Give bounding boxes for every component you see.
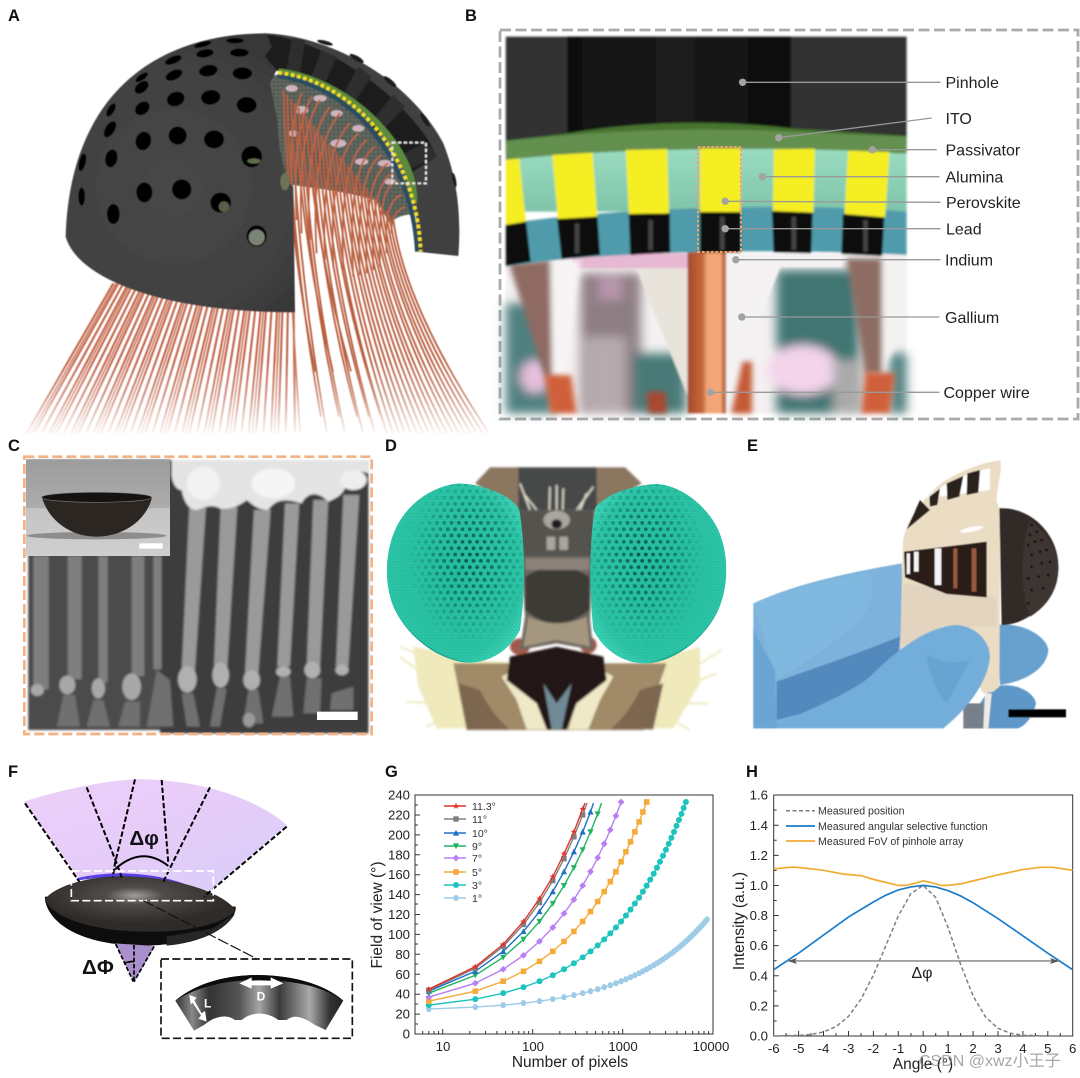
pinholes on device	[1027, 524, 1051, 605]
legend labels: 5°	[472, 867, 482, 879]
axis ticks	[415, 805, 709, 1034]
callout: Pinhole	[739, 75, 999, 92]
y tick labels: 0.2	[750, 998, 768, 1013]
curve 11.3 degrees	[429, 803, 585, 989]
legend labels	[472, 801, 496, 905]
legend labels: 9°	[472, 841, 482, 853]
curve 7 degrees	[429, 802, 621, 997]
mouthparts	[507, 647, 607, 729]
curve 5 degrees	[429, 802, 647, 1001]
x tick labels: -6	[768, 1041, 780, 1056]
legend	[786, 806, 988, 848]
upper window with dark slots	[907, 468, 990, 528]
panel label A: A	[8, 7, 20, 25]
column highlights	[575, 217, 868, 253]
y tick labels: 40	[395, 987, 410, 1002]
x tick labels: 10000	[693, 1039, 729, 1054]
upper head	[475, 467, 642, 513]
x tick labels	[436, 1039, 729, 1054]
y tick labels: 60	[395, 967, 410, 982]
small angle arc	[124, 962, 134, 963]
legend labels: 7°	[472, 853, 482, 865]
x tick labels: 6	[1069, 1041, 1076, 1056]
x tick labels	[768, 1041, 1076, 1056]
y tick labels: 100	[388, 927, 410, 942]
blurred teal and pink backdrop	[506, 270, 907, 413]
far right fingers	[997, 625, 1048, 685]
angle arc	[115, 856, 168, 869]
copper wires fanning below the dome	[27, 283, 295, 433]
white dashed zoom region	[71, 871, 213, 901]
plot frame	[415, 795, 713, 1034]
central face	[518, 510, 595, 650]
y tick labels: 240	[388, 788, 410, 802]
D dimension arrow	[239, 977, 283, 989]
light nanowires, right group	[182, 495, 359, 673]
y tick labels: 0	[403, 1026, 410, 1042]
curved wire ends at sensors	[291, 93, 405, 277]
antenna base	[543, 511, 570, 550]
callout: Passivator	[869, 142, 1021, 160]
Δφ label: Δφ	[911, 965, 933, 982]
panel G: field of view versus number of pixels chart	[369, 788, 729, 1071]
y tick labels: 140	[388, 887, 410, 902]
dashed field boundaries	[25, 779, 287, 897]
photosensor strip: passivator, lead and perovskite	[278, 72, 413, 203]
pink indium strip	[572, 253, 689, 268]
x tick labels: 1000	[608, 1039, 638, 1054]
y tick labels: 0.6	[750, 938, 768, 953]
pink indium spots	[286, 85, 396, 185]
callout: Alumina	[758, 170, 1003, 186]
lead black columns	[506, 211, 884, 266]
width arrow with arrowheads	[788, 958, 1059, 964]
D label: D	[257, 990, 266, 1004]
copper wires rising to the sensors	[283, 90, 489, 433]
dotted highlight around one pixel	[698, 147, 741, 252]
middle window with dark slots	[904, 542, 987, 597]
cheek tufts	[413, 647, 700, 728]
inset photo of bowl	[26, 459, 170, 556]
layered render	[506, 37, 907, 413]
cone dashed boundaries	[116, 944, 154, 982]
legend: Measured FoV of pinhole array	[818, 836, 964, 848]
callout: Indium: Indium	[945, 252, 993, 270]
purple cone beneath the disc	[115, 943, 155, 982]
panel label C: C	[8, 437, 20, 455]
x tick labels: 100	[522, 1039, 544, 1054]
blue band at dome edge	[77, 873, 208, 895]
measured angular selective function curve	[774, 885, 1073, 970]
panel label H: H	[746, 763, 758, 781]
legend labels: 3°	[472, 880, 482, 892]
purple field-of-view fan	[24, 779, 287, 897]
y tick labels: 20	[395, 1007, 410, 1022]
scale bar	[317, 712, 358, 720]
head and face behind the eyes	[400, 467, 722, 730]
panel label E: E	[747, 437, 758, 455]
channel pillars	[287, 38, 437, 170]
pinhole openings on cut rim	[317, 39, 457, 188]
y tick labels: 200	[388, 827, 410, 842]
panel B: layered pixel cross-section with callouts	[500, 30, 1078, 419]
right compound eye	[590, 484, 726, 664]
y tick labels: 0.0	[750, 1028, 768, 1044]
callout: ITO: ITO	[946, 111, 972, 128]
callout: Pinhole: Pinhole	[946, 75, 999, 92]
y tick labels: 0.4	[750, 968, 768, 983]
panel label F: F	[8, 763, 18, 781]
panel label G: G	[385, 763, 398, 781]
panel C: SEM image of nanowires with inset photo	[24, 457, 372, 734]
ΔΦ label: ΔΦ	[82, 956, 114, 979]
x axis title: Number of pixels	[512, 1054, 628, 1071]
device holder	[900, 461, 1001, 693]
upper pinhole block	[506, 37, 907, 143]
x tick labels: -2	[868, 1041, 879, 1056]
shell cut face	[263, 33, 459, 256]
fade of the wires into white	[0, 360, 500, 437]
x tick labels: 3	[994, 1041, 1002, 1056]
curve 9 degrees	[429, 803, 602, 993]
passivator band	[506, 129, 907, 160]
y tick labels: 120	[388, 907, 410, 922]
legend: Measured position	[818, 806, 905, 818]
y tick labels: 1.0	[750, 878, 768, 893]
legend labels: 11.3°	[472, 801, 496, 813]
inner mesh surface	[263, 75, 417, 223]
alumina lower layer	[506, 207, 907, 267]
left compound eye	[386, 483, 524, 663]
y tick labels	[388, 788, 410, 1042]
callout: Copper wire	[707, 385, 1030, 402]
panel F: field of view schematic	[24, 779, 352, 1038]
panel A: cutaway hemispherical eye with copper wires	[0, 33, 500, 437]
legend labels: 11°	[472, 814, 487, 826]
nanowire nodules, left group	[31, 673, 141, 700]
panel label B: B	[465, 7, 477, 25]
dark pinhole channels in cut face	[263, 35, 437, 173]
ITO ridge	[506, 123, 907, 153]
leader to inset	[143, 901, 256, 958]
callout: Lead	[722, 222, 982, 238]
y tick labels: 160	[388, 867, 410, 882]
curves	[774, 867, 1073, 1036]
measured FoV of pinhole array curve	[774, 867, 1073, 885]
y axis title: Field of view (°)	[369, 862, 386, 968]
wire lead hanging below	[963, 703, 983, 728]
white dotted region of interest	[392, 143, 426, 183]
front thumb of glove	[765, 625, 990, 728]
x tick labels: -5	[793, 1041, 804, 1056]
x tick labels: 4	[1019, 1041, 1027, 1056]
x tick labels: 0	[920, 1041, 927, 1056]
y tick labels: 220	[388, 808, 410, 822]
callout: Copper wire: Copper wire	[944, 385, 1030, 402]
y tick labels: 1.6	[750, 788, 768, 802]
pinhole openings on front shell	[77, 38, 267, 247]
x tick labels: 5	[1044, 1041, 1051, 1056]
center copper wire	[688, 252, 726, 413]
legend labels: 1°	[472, 893, 482, 905]
perovskite yellow columns	[506, 148, 890, 225]
y tick labels: 180	[388, 847, 410, 862]
curve 11 degrees	[429, 803, 587, 990]
legend labels: 10°	[472, 828, 488, 840]
y axis title: Intensity (a.u.)	[731, 872, 748, 970]
black hemispherical eye with dots	[999, 508, 1058, 625]
callout: Gallium: Gallium	[945, 310, 999, 327]
side gallium cones	[509, 258, 907, 377]
alumina upper layer	[506, 149, 907, 212]
y tick labels: 80	[395, 947, 410, 962]
Δφ label: Δφ	[129, 827, 159, 850]
lower face	[453, 663, 667, 730]
holder shading	[900, 583, 997, 647]
panel label D: D	[385, 437, 397, 455]
callout: Perovskite: Perovskite	[946, 195, 1021, 212]
glimpses of the sensors through pinholes	[247, 158, 261, 164]
front shell of the dome	[66, 33, 295, 312]
callout: Alumina: Alumina	[946, 170, 1003, 186]
x tick labels: -3	[843, 1041, 854, 1056]
nanowire nodules, right group	[178, 662, 349, 693]
curve 10 degrees	[429, 803, 594, 991]
L label: L	[204, 996, 211, 1010]
scale bar	[1008, 709, 1066, 717]
data curves	[429, 802, 707, 1009]
y tick labels: 1.2	[750, 848, 768, 863]
plot frame	[774, 795, 1073, 1036]
panel H: intensity versus angle chart	[731, 788, 1076, 1073]
callout: Passivator: Passivator	[946, 142, 1021, 160]
callout: Indium	[732, 252, 993, 270]
dark lens disc	[45, 876, 236, 946]
white tops of nanowires	[172, 460, 368, 510]
frontal bristles	[520, 483, 593, 510]
SEM micrograph	[28, 460, 368, 733]
L dimension arrow	[189, 995, 207, 1022]
inset: pinhole geometry	[161, 959, 352, 1038]
x tick labels: -4	[818, 1041, 829, 1056]
x tick labels: 1	[944, 1041, 952, 1056]
panel D: macro photo of insect compound eyes	[380, 467, 733, 730]
x tick labels: 10	[436, 1039, 450, 1054]
back of glove	[753, 563, 905, 728]
curve 1 degree	[429, 919, 707, 1009]
measured position curve	[774, 885, 1073, 1036]
light nanowires, left group	[33, 556, 162, 689]
legend swatches	[444, 806, 466, 898]
roots beneath the nodules	[57, 670, 353, 727]
y tick labels	[750, 788, 768, 1044]
callout: Perovskite	[722, 195, 1021, 212]
hairs on cheeks	[400, 647, 722, 730]
y tick labels: 0.8	[750, 908, 768, 923]
curve 3 degrees	[429, 802, 686, 1005]
center gallium cone	[636, 268, 688, 397]
callout: Gallium	[738, 310, 999, 327]
panel E: photo of gloved hand holding the device	[753, 461, 1066, 728]
gray dashed border	[500, 30, 1078, 419]
watermark: CSDN @xwz小王子	[919, 1052, 1061, 1070]
callout: Lead: Lead	[946, 222, 982, 238]
side copper wires	[545, 362, 895, 413]
x tick labels: -1	[892, 1041, 904, 1056]
y tick labels: 1.4	[750, 818, 768, 833]
axis ticks	[774, 810, 1060, 1036]
x tick labels: 2	[969, 1041, 977, 1056]
legend: Measured angular selective function	[818, 821, 988, 833]
x axis title: Angle (°)	[893, 1056, 953, 1073]
bottom background	[506, 253, 907, 413]
orange dashed border	[24, 457, 372, 734]
callout: ITO	[775, 111, 972, 141]
